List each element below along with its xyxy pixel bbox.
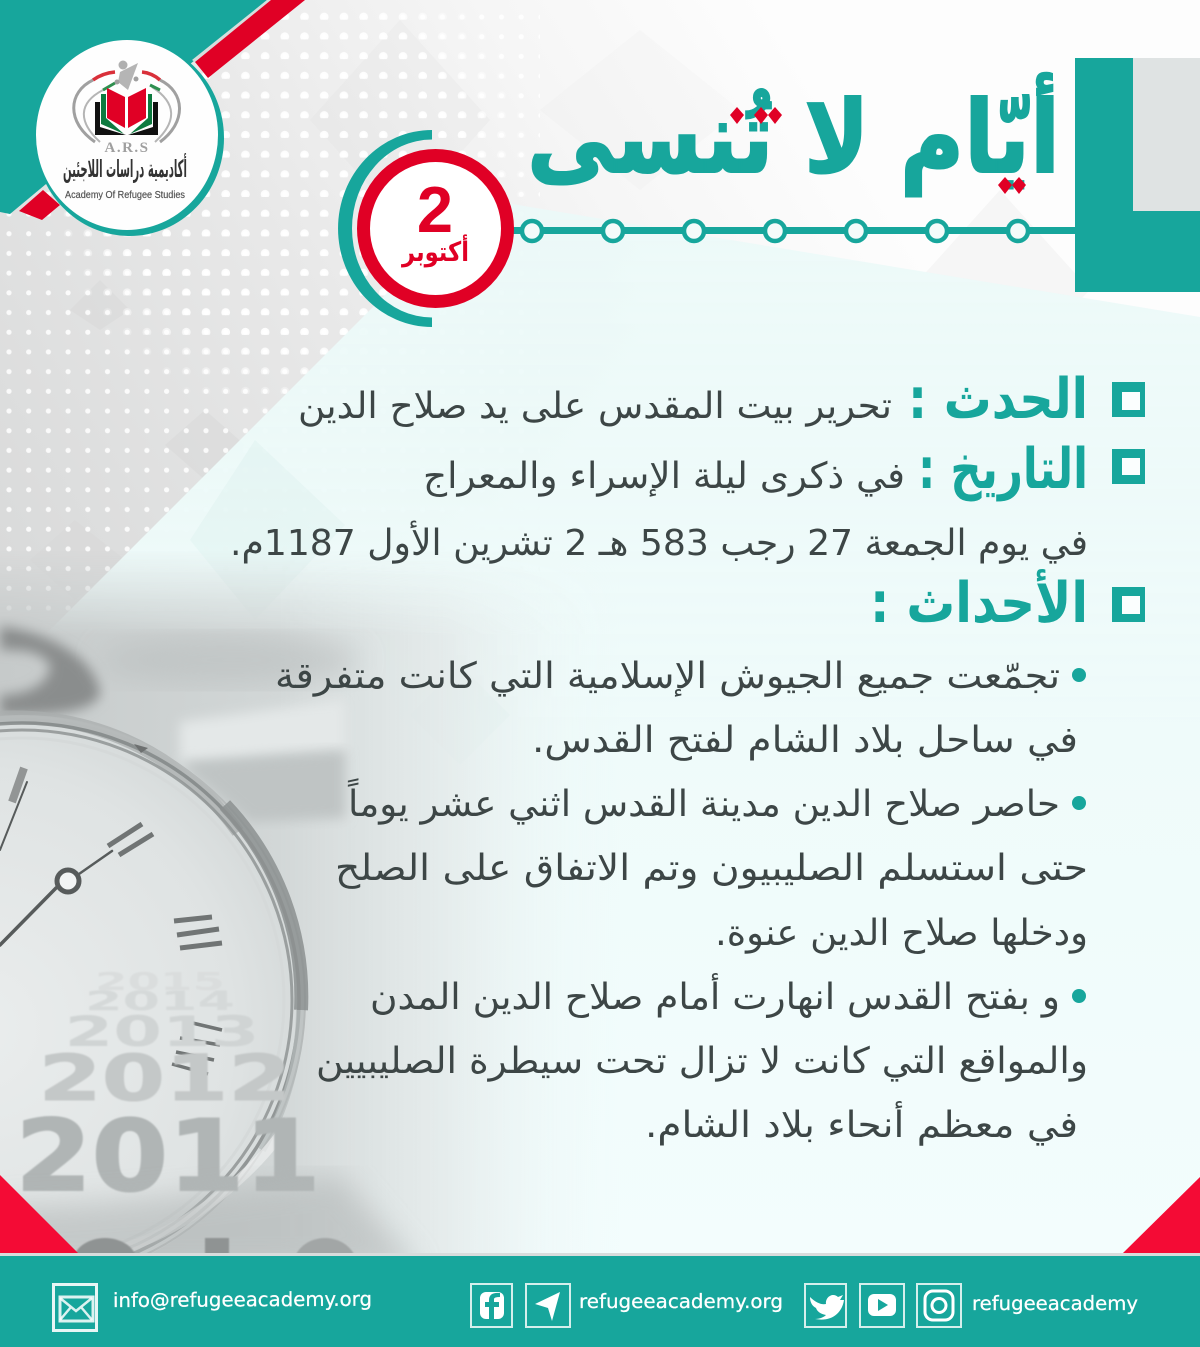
title red dots [730, 107, 1026, 194]
corner light edge [192, 0, 271, 62]
website handle: refugeeacademy.org [579, 1290, 783, 1313]
clock hands [0, 782, 112, 945]
date detail: في يوم الجمعة 27 رجب 583 هـ 2 تشرين الأول 1187م. [230, 520, 1088, 564]
event bullet 1 [275, 656, 1086, 761]
badge white disc [36, 40, 218, 230]
panel diamonds [190, 440, 510, 925]
heading: date: التاريخ : [918, 437, 1088, 502]
heading: event: الحدث : [908, 367, 1088, 432]
date text: في ذكرى ليلة الإسراء والمعراج [423, 456, 905, 497]
roman numerals [12, 768, 222, 1074]
icon: youtube [860, 1284, 904, 1327]
background dot pattern [6, 12, 540, 610]
date month: أكتوبر [400, 234, 469, 268]
date teal crescent [338, 130, 432, 327]
date red ring [364, 156, 508, 302]
mint content panel [0, 199, 1200, 1256]
teal corner shape [0, 0, 267, 214]
logo badge [35, 40, 224, 236]
grey photo wash [0, 566, 508, 1253]
bullet square highlights [1122, 392, 1140, 614]
red triangle right [1123, 1177, 1200, 1253]
icon: telegram [526, 1284, 570, 1327]
year numerals: 2015 [95, 967, 225, 996]
timeline [510, 221, 1076, 241]
logo badge: أكاديمية دراسات اللاجئين [63, 153, 187, 183]
event bullet 2: حتى استسلم الصليبيون وتم الاتفاق على الصلح [335, 848, 1088, 889]
red triangle left [0, 1175, 78, 1253]
blurred ring top-left [0, 625, 100, 715]
clock body [0, 715, 305, 1285]
event bullet 2: حاصر صلاح الدين مدينة القدس اثني عشر يوماً [347, 778, 1060, 825]
logo initials: A.R.S [104, 140, 150, 156]
event bullet 1: في ساحل بلاد الشام لفتح القدس. [532, 720, 1078, 761]
event bullet 3: و بفتح القدس انهارت أمام صلاح الدين المدن [370, 973, 1060, 1018]
dark strip behind clock [180, 750, 345, 822]
year numerals: 2012 [38, 1042, 292, 1115]
cropped year at base [76, 1238, 354, 1253]
year numerals: 2013 [64, 1007, 260, 1056]
date badge [338, 130, 508, 327]
year numerals: 2014 [85, 986, 235, 1017]
icon: facebook [471, 1284, 512, 1327]
event bullet 1: تجمّعت جميع الجيوش الإسلامية التي كانت متفرقة [275, 656, 1060, 697]
date number: 2 [417, 173, 453, 246]
email address: info@refugeeacademy.org [113, 1288, 372, 1312]
icon: email [54, 1284, 96, 1330]
clock photo background [0, 566, 508, 1253]
red stripe top [195, 0, 305, 78]
social handle: refugeeacademy [972, 1292, 1138, 1315]
bullet squares [1112, 382, 1145, 622]
event bullet 3 [316, 973, 1088, 1146]
heading: events: الأحداث : [870, 568, 1088, 636]
event bullet 3: والمواقع التي كانت لا تزال تحت سيطرة الصليبيين [316, 1041, 1088, 1082]
icon: twitter [805, 1284, 846, 1327]
haze across top of photo [127, 636, 353, 684]
year numerals: 2011 [16, 1100, 320, 1214]
light strip behind clock [178, 704, 342, 764]
event bullet 2: ودخلها صلاح الدين عنوة. [715, 913, 1088, 954]
logo emblem [74, 60, 180, 142]
year numerals [22, 972, 314, 1193]
event text: تحرير بيت المقدس على يد صلاح الدين [298, 386, 892, 427]
event bullet 3: في معظم أنحاء بلاد الشام. [645, 1101, 1078, 1146]
badge teal ring [35, 40, 224, 236]
footer separator [0, 1253, 1200, 1256]
logo english name: Academy Of Refugee Studies [65, 190, 185, 201]
red stripe bottom [19, 190, 60, 220]
dark base of photo [22, 1172, 412, 1253]
footer band [0, 1256, 1200, 1347]
event bullet 2 [335, 778, 1088, 954]
header right block [1075, 58, 1200, 292]
icon: instagram [917, 1284, 961, 1327]
title: أيّام لا تُنسى [527, 72, 1060, 196]
background faint diamonds [30, 20, 1090, 600]
